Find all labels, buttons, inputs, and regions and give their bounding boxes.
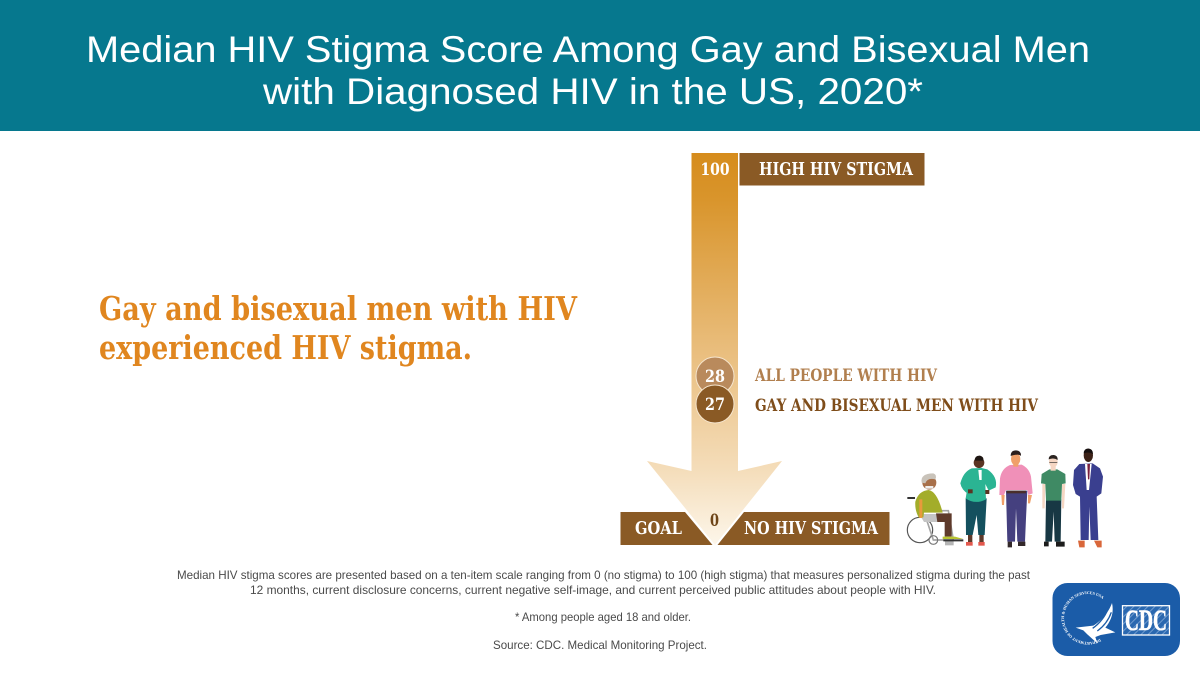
methodology note: Median HIV stigma scores are presented based on a ten-item scale ranging from 0 (no stigma) to 100 (high stigma) that measures personalized stigma during the past [177,569,1031,582]
label: gay and bisexual men with HIV: GAY AND BISEXUAL MEN WITH HIV [755,396,1039,415]
key message heading [99,289,578,367]
label: high HIV stigma [740,153,924,186]
label: no HIV stigma [718,512,890,545]
marker: gay and bisexual men 27: 27 [705,395,725,415]
key message heading: experienced HIV stigma. [99,328,472,367]
label: goal: GOAL [635,518,682,539]
title: Median HIV Stigma Score Among Gay and Bisexual Men [86,28,1090,70]
illustration: group of men [907,449,1103,547]
scale arrow [647,153,782,545]
person in blue suit [1073,449,1103,547]
label: no HIV stigma: NO HIV STIGMA [744,518,879,539]
marker: gay and bisexual men 27 [696,385,734,423]
person in pink shirt [999,450,1033,547]
person in green jacket [960,456,996,546]
age footnote: * Among people aged 18 and older. [515,611,691,624]
title: with Diagnosed HIV in the US, 2020* [262,70,923,112]
label: all people with HIV: ALL PEOPLE WITH HIV [754,366,938,385]
label: goal [620,512,712,545]
methodology note: 12 months, current disclosure concerns, current negative self-image, and current perceived public attitudes about people with HIV. [250,584,936,597]
header banner [0,0,1200,131]
scale value 100: 100 [700,160,730,180]
label: high HIV stigma: HIGH HIV STIGMA [759,159,914,180]
person in wheelchair [907,473,963,545]
logo: HHS and CDC [1052,583,1180,656]
key message heading: Gay and bisexual men with HIV [99,289,578,328]
icon: eagle [1076,603,1115,643]
source: Source: CDC. Medical Monitoring Project. [493,639,707,652]
marker: all people with HIV 28: 28 [705,367,725,387]
methodology note [177,569,1031,597]
marker: all people with HIV 28 [696,357,734,395]
scale value 0: 0 [710,511,719,531]
title [86,28,1090,112]
logo: HHS and CDC: DEPARTMENT OF HEALTH & HUMAN SERVICES USA [1061,591,1104,645]
person in green polo [1041,455,1066,547]
CDC wordmark: CDC [1125,604,1167,637]
